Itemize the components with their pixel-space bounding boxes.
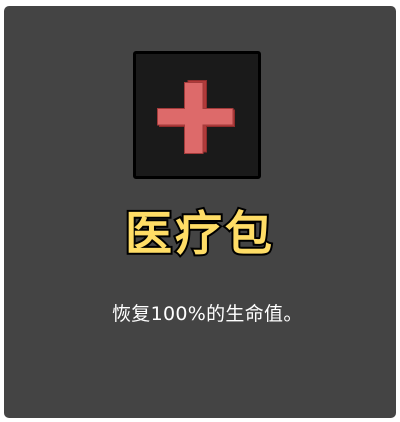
title: 医疗包	[125, 207, 275, 262]
icon: medkit red cross	[133, 51, 261, 179]
description text: 恢复100%的生命值。	[112, 303, 303, 325]
